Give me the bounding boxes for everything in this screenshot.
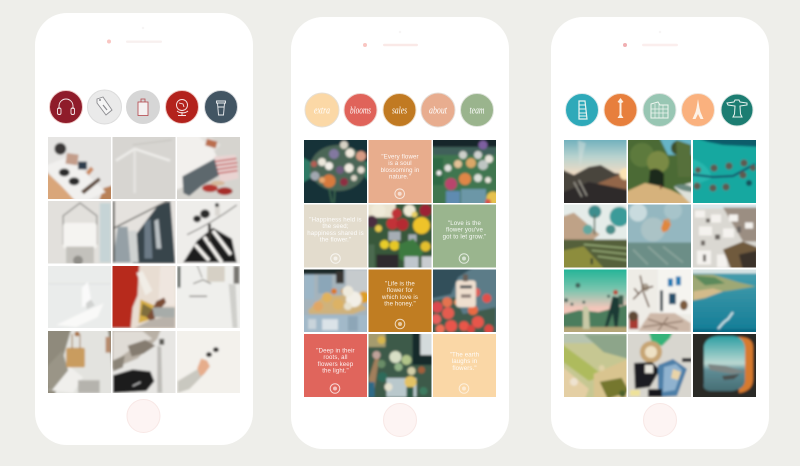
photo: straw bag	[48, 331, 111, 393]
photo: roses in paper	[304, 270, 367, 332]
photo: valley town	[564, 334, 626, 397]
phone body	[291, 17, 509, 449]
quote: every flower: "Every flower	[381, 154, 419, 160]
home button: phone 1	[127, 400, 160, 432]
highlight: extra: extra	[314, 104, 330, 116]
quote: life is the flower: the honey."	[384, 301, 416, 308]
quote: every flower: blossoming in	[381, 167, 419, 174]
quote: the earth laughs: "The earth	[450, 352, 479, 358]
home buttons	[127, 400, 676, 436]
photo: white hanger	[112, 137, 176, 199]
speaker and camera	[363, 31, 418, 47]
photo: rice terraces	[564, 204, 626, 268]
highlight: about	[421, 93, 455, 127]
photo: airplane window	[693, 334, 756, 397]
quote: love is the flower	[433, 204, 496, 268]
highlight: team: team	[470, 104, 485, 116]
home button: phone 3	[644, 404, 676, 436]
quote: happiness held: happiness shared is	[307, 230, 364, 237]
quote: life is the flower: which love is	[381, 294, 418, 301]
icon: shopping bag	[126, 90, 160, 124]
quote: life is the flower	[368, 270, 432, 332]
icon: colosseum	[643, 94, 676, 126]
quote: every flower: nature."	[389, 174, 411, 181]
icon: globe	[166, 90, 198, 124]
speaker and camera	[623, 31, 678, 47]
icon: headphones	[50, 90, 82, 124]
quote: the earth laughs: flowers."	[452, 365, 477, 372]
photo: hot air balloons	[564, 270, 626, 332]
highlight circles	[305, 93, 494, 127]
photo: red and yellow flowers	[368, 204, 432, 268]
photo: bouquet	[304, 140, 367, 203]
speaker and camera	[107, 27, 162, 44]
highlight icons	[566, 94, 753, 126]
photo: towel rack	[48, 201, 111, 264]
quote: every flower: is a soul	[388, 160, 412, 167]
photo: coast aerial	[693, 270, 756, 332]
phone 2: flower shop feed	[291, 17, 509, 449]
quote: happiness held: the flower."	[320, 237, 351, 244]
photo: mountain sunset	[564, 140, 626, 203]
photo and quote grid	[299, 135, 501, 402]
phone 1: fashion feed	[35, 13, 253, 445]
icon: price tag	[88, 90, 122, 124]
quote: happiness held: the seed;	[322, 223, 349, 230]
photo: santorini town	[693, 204, 756, 268]
quote: love is the flower: flower you've	[446, 227, 483, 234]
photo: swing over jungle	[628, 204, 691, 268]
quote: deep in their roots: the light."	[322, 368, 349, 375]
highlight icons	[50, 90, 238, 124]
highlight: extra	[305, 93, 339, 127]
quote: love is the flower: "Love is the	[448, 220, 482, 227]
highlight: about: about	[429, 104, 448, 116]
photo: white shirt on hanger	[177, 266, 240, 328]
quote: life is the flower: flower for	[387, 287, 413, 294]
photo: clothes rail	[112, 201, 176, 264]
icon: monument	[604, 94, 637, 126]
quote: love is the flower: got to let grow."	[443, 233, 486, 240]
highlight: sales	[383, 94, 416, 126]
quote: deep in their roots: roots, all	[323, 354, 348, 361]
quote: the earth laughs: laughs in	[452, 358, 477, 365]
photo: red carpet and sneakers	[112, 266, 176, 328]
photo: folded clothes and shoes	[177, 137, 240, 199]
icon: eiffel tower	[682, 94, 714, 126]
quote: the earth laughs	[433, 334, 496, 397]
photo: flat lay accessories	[48, 137, 111, 199]
quote: life is the flower: "Life is the	[385, 280, 415, 288]
phone 3: travel feed	[551, 17, 769, 449]
photo: greek alley	[628, 270, 691, 332]
quote: deep in their roots: flowers keep	[318, 361, 354, 368]
quote: happiness held: "Happiness held is	[309, 216, 362, 224]
photo: flower buckets	[433, 140, 496, 203]
photo: packed suitcase	[628, 334, 691, 397]
highlight: team	[460, 94, 494, 126]
quote: deep in their roots	[304, 334, 367, 397]
phone body	[35, 13, 253, 445]
quote: every flower	[368, 140, 432, 203]
photo grid	[43, 132, 245, 398]
highlight: blooms: blooms	[350, 104, 371, 116]
phone body	[551, 17, 769, 449]
photo: tulips with price tag	[433, 270, 496, 332]
icon: coffee cup	[204, 90, 238, 124]
quote: happiness held	[304, 204, 367, 268]
photo: overwater bungalows	[693, 140, 756, 203]
quote: deep in their roots: "Deep in their	[316, 348, 355, 354]
photo: tropical beach	[628, 140, 691, 203]
icon: christ the redeemer	[721, 94, 753, 126]
photo: hand with sunglasses	[177, 331, 240, 393]
home button: phone 2	[384, 404, 416, 436]
photo: flower shop	[368, 334, 432, 397]
photo: white sneaker leg	[48, 266, 111, 328]
photo grid	[559, 135, 761, 402]
photo: flat lay bag and sunglasses	[177, 201, 240, 264]
highlight: blooms	[344, 94, 377, 126]
icon: leaning tower	[566, 94, 598, 126]
highlight: sales: sales	[392, 104, 407, 116]
photo: black garment and fabric	[112, 331, 176, 393]
